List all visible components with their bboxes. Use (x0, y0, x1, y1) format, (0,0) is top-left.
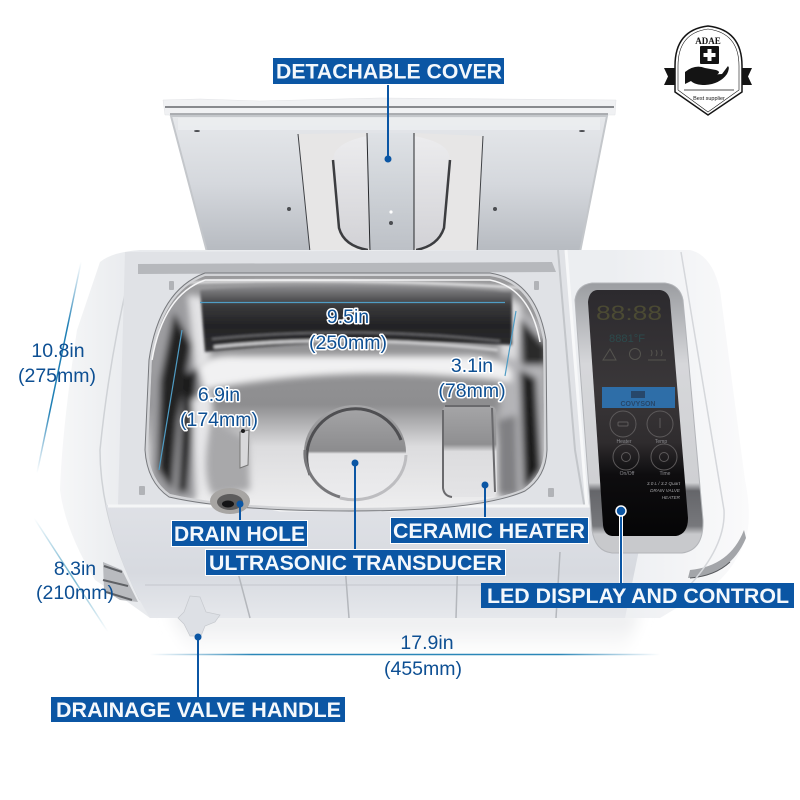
dimension: height 8.3in: (210mm) (36, 582, 114, 604)
temperature readout: 8881°F (609, 333, 645, 345)
cover left strip (298, 133, 370, 252)
lower left pad (206, 420, 250, 495)
ground shadow (170, 612, 640, 655)
detachable cover (163, 98, 616, 252)
side chrome bands (103, 530, 746, 602)
dimension: tank width 9.5in: (250mm) (309, 332, 387, 354)
button captions: On/Off (620, 471, 635, 477)
right wall (498, 292, 545, 500)
panel spec text: 3.0 L / 3.2 Quart (647, 481, 681, 486)
time readout: 88:88 (596, 302, 662, 325)
dimension: tank depth 3.1in: 3.1in (451, 355, 493, 377)
right shell seam (681, 252, 724, 585)
dimension: tank length 6.9in (159, 330, 258, 470)
dimension: overall width 17.9in: 17.9in (400, 632, 454, 654)
cover inner face (171, 116, 607, 252)
dimension: body depth 10.8in (18, 262, 96, 473)
brand strip: COVYSON (620, 401, 656, 408)
dimension: overall width 17.9in (150, 632, 660, 680)
warning icons (603, 348, 666, 360)
drainage valve handle (178, 596, 220, 636)
dimension: tank depth 3.1in: (78mm) (438, 380, 506, 402)
lid frame around tub (118, 250, 600, 545)
dimension: tank length 6.9in: (174mm) (180, 409, 258, 431)
label: ultrasonic transducer: ULTRASONIC TRANSDUCER (209, 552, 502, 575)
dimension: tank width 9.5in: 9.5in (327, 306, 369, 328)
cover tank left (333, 136, 370, 248)
machine body (60, 250, 749, 618)
dimension: height 8.3in (34, 518, 114, 632)
label: drainage valve handle: DRAINAGE VALVE HANDLE (56, 699, 341, 722)
black glass (588, 290, 688, 536)
cover screws (194, 130, 585, 225)
lid corner pegs (139, 281, 554, 497)
button captions: Heater (616, 439, 632, 445)
stainless tub (139, 270, 554, 515)
leader lines and dots (194, 85, 626, 697)
floor highlight band (198, 356, 512, 390)
cover rear bar (163, 98, 616, 115)
chrome bezel (575, 283, 703, 553)
dimension: tank length 6.9in: 6.9in (198, 384, 240, 406)
shield (675, 26, 742, 115)
ADAE best supplier badge (664, 26, 752, 115)
dimension: overall width 17.9in: (455mm) (384, 658, 462, 680)
panel spec text: DRAIN VALVE (650, 488, 681, 493)
drain fitting (210, 488, 250, 514)
label: LED display and control: LED DISPLAY AND CONTROL (487, 585, 789, 608)
brand strip (602, 387, 675, 408)
back wall (170, 281, 525, 352)
label: ceramic heater: CERAMIC HEATER (393, 520, 585, 543)
LED control panel (575, 283, 703, 553)
button captions: Temp (655, 439, 667, 445)
button captions: Time (660, 471, 671, 477)
dimension: height 8.3in: 8.3in (54, 558, 96, 580)
button captions (616, 439, 671, 477)
ribbon (664, 68, 752, 85)
tub side slot (240, 430, 249, 468)
cover tank right (414, 136, 450, 248)
open hand (685, 66, 729, 85)
dimension: body depth 10.8in: 10.8in (31, 340, 85, 362)
dimension: tank depth 3.1in (438, 311, 516, 402)
cover right strip (414, 133, 483, 252)
left shell seam (100, 252, 140, 600)
medical cross (700, 46, 719, 64)
label: detachable cover: DETACHABLE COVER (276, 60, 502, 84)
panel spec text (647, 481, 681, 500)
badge name: ADAE (695, 36, 721, 46)
ceramic heater plate (442, 406, 497, 497)
panel spec text: HEATER (662, 495, 681, 500)
dimension: body depth 10.8in: (275mm) (18, 365, 96, 387)
cover center stem (367, 133, 414, 252)
badge caption: Best supplier (693, 96, 725, 102)
label: drain hole: DRAIN HOLE (174, 523, 305, 546)
ultrasonic transducer disc (304, 405, 406, 500)
left wall (150, 290, 214, 500)
front panel (106, 505, 640, 618)
touch buttons (610, 411, 677, 470)
dimension: tank width 9.5in (200, 302, 505, 354)
tub rim highlight (205, 280, 540, 342)
